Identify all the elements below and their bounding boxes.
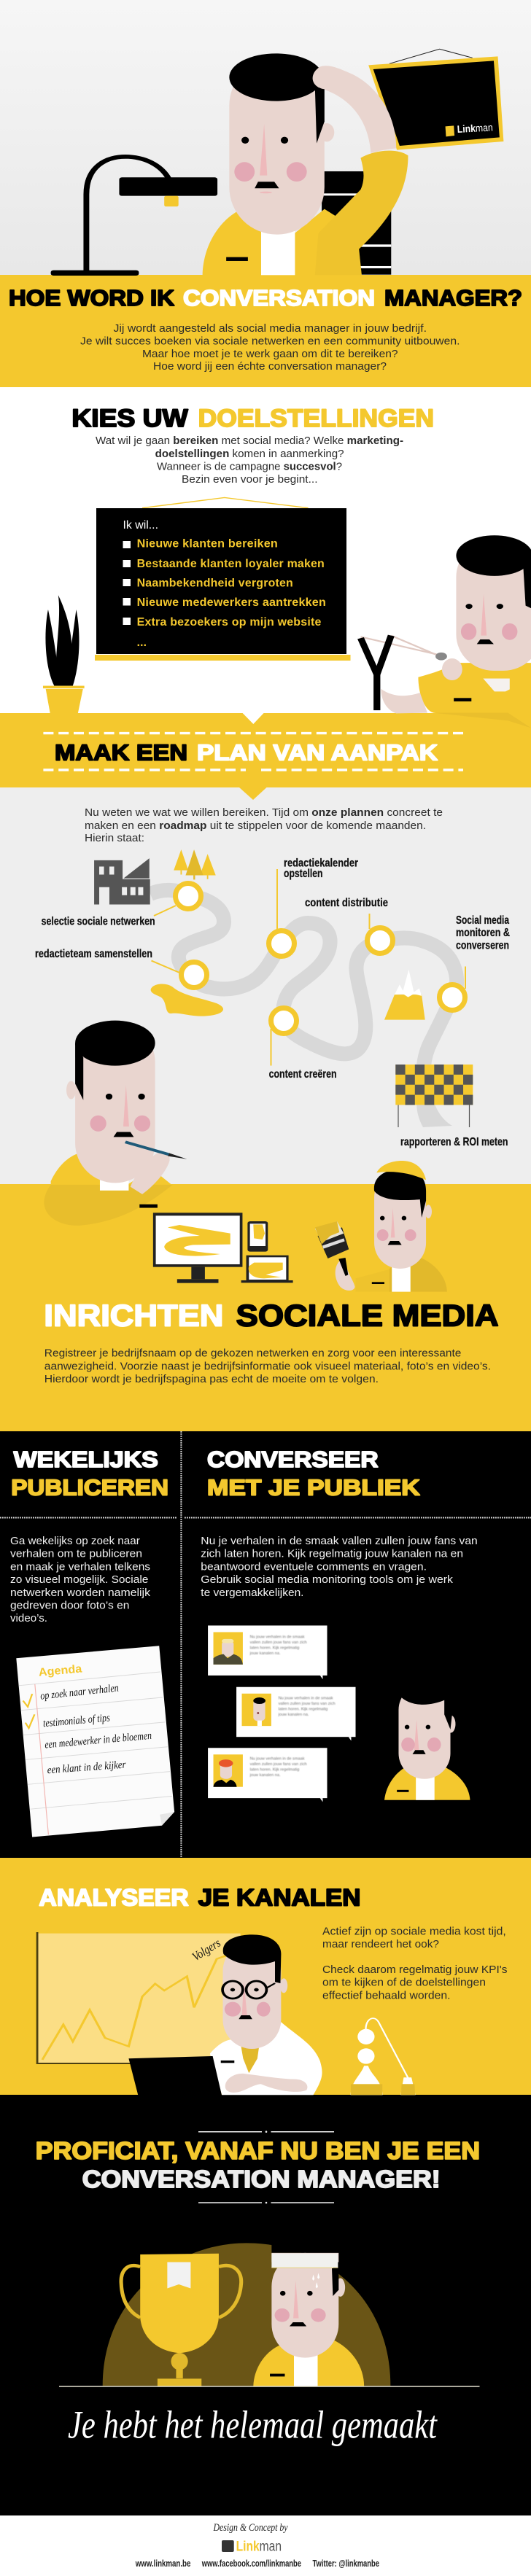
text: converseer: [201, 1535, 478, 1599]
heading: maak een plan van aanpak: PLAN VAN AANPAK: [197, 739, 438, 766]
chat bubble 2: vallen zullen jouw fans van zich: [279, 1702, 336, 1706]
dotted dividers: [0, 1431, 531, 1858]
roadmap labels: selectie sociale netwerken: [42, 916, 155, 928]
roadmap icon: trees: [174, 849, 216, 879]
heading: converseer met je publiek: CONVERSEER: [207, 1447, 379, 1472]
text: plan intro: Hierin staat:: [85, 832, 144, 844]
heading: proficiat: PROFICIAT, VANAF NU BEN JE EEN: [36, 2137, 480, 2164]
text: wekelijks publiceren: [10, 1535, 151, 1624]
roadmap labels: converseren: [456, 939, 509, 952]
character: manager with slingshot: [360, 535, 531, 728]
footer credits: www.linkman.be: [135, 2559, 190, 2569]
text: wekelijks publiceren: verhalen om te publiceren: [10, 1548, 142, 1560]
text: inrichten: [44, 1347, 491, 1385]
chat bubble 2: laten horen. Kijk regelmatig: [279, 1708, 327, 1712]
roadmap labels: Social media: [456, 914, 509, 927]
heading: analyseer je kanalen: ANALYSEER: [39, 1884, 189, 1910]
chat bubble 3: vallen zullen jouw fans van zich: [250, 1762, 307, 1767]
heading: inrichten sociale media: SOCIALE MEDIA: [236, 1298, 499, 1332]
roadmap labels: opstellen: [284, 868, 322, 880]
intro text: Je wilt succes boeken via sociale netwerken en een community uitbouwen.: [80, 335, 460, 348]
roadmap icon: pond: [151, 984, 223, 1016]
icon: desk lamp: [51, 157, 217, 276]
panel: goals blackboard: Extra bezoekers op mijn website: [137, 616, 322, 629]
icon: devices with paint swoosh: [153, 1213, 293, 1283]
title: HOE WORD IK: [9, 285, 175, 311]
icon: hanging sign with logo: [368, 49, 503, 150]
heading: wekelijks publiceren: PUBLICEREN: [11, 1474, 168, 1500]
heading: proficiat: CONVERSATION MANAGER!: [82, 2166, 441, 2192]
title: [9, 285, 522, 311]
arrow pointer into roadmap: [239, 787, 267, 800]
heading: kies uw doelstellingen: [71, 405, 434, 432]
agenda paper note: Agenda: [38, 1663, 82, 1679]
character: manager scratching head: [203, 53, 408, 275]
title: CONVERSATION: [183, 285, 375, 311]
text: inrichten: Hierdoor wordt je bedrijfspagina pas echt de moeite om te volgen.: [44, 1373, 379, 1385]
footer credits: www.facebook.com/linkmanbe: [201, 2559, 301, 2569]
panel: goals blackboard: Nieuwe klanten bereiken: [137, 538, 278, 550]
intro text: Jij wordt aangesteld als social media manager in jouw bedrijf.: [114, 322, 427, 335]
panel: goals blackboard: Nieuwe medewerkers aantrekken: [137, 596, 326, 609]
panel: goals blackboard: ...: [137, 637, 147, 649]
roadmap nodes and leader lines: [152, 869, 465, 1066]
text: converseer: zich laten horen. Kijk regelmatig jouw kanalen na en: [201, 1548, 463, 1560]
intro text: Hoe word jij een échte conversation manager?: [153, 360, 387, 373]
character: manager with paintbrush: [315, 1161, 447, 1292]
roadmap icon: mountain: [384, 970, 425, 1020]
agenda paper note: testimonials of tips: [42, 1712, 111, 1729]
text: inrichten: Registreer je bedrijfsnaam op de gekozen netwerken en zorg voor een interessante: [44, 1347, 461, 1360]
heading: inrichten sociale media: [44, 1298, 499, 1332]
text: inrichten: aanwezigheid. Voorzie naast je bedrijfsinformatie ook visueel materiaal, foto’s en video’s.: [44, 1360, 491, 1372]
closing script line: Je hebt het helemaal gemaakt: [68, 2403, 438, 2447]
character: manager listening: [384, 1676, 470, 1800]
icon: laboratory flasks: [351, 2018, 416, 2095]
chat bubble 2: Nu jouw verhalen in de smaak: [279, 1697, 333, 1701]
chat bubble 3: [208, 1748, 327, 1802]
ground line: [59, 2386, 480, 2387]
heading: maak een plan van aanpak: [43, 734, 463, 770]
text: analyseer: Actief zijn op sociale media kost tijd,: [322, 1925, 506, 1937]
roadmap labels: redactiekalender: [284, 857, 358, 869]
roadmap icon: building: [94, 858, 150, 905]
chat bubble 1: [208, 1625, 327, 1679]
chat bubble 1: vallen zullen jouw fans van zich: [250, 1641, 307, 1645]
text: plan intro: Nu weten we wat we willen bereiken. Tijd om onze plannen concreet te: [85, 806, 443, 819]
text: goals intro: Wat wil je gaan bereiken met social media? Welke marketing-: [96, 435, 403, 447]
roadmap road: [150, 890, 457, 1127]
footer credits: Design & Concept by: [213, 2522, 288, 2534]
intro text: [80, 322, 460, 373]
olive half circle backdrop: [103, 2243, 390, 2386]
chat bubble 3: Nu jouw verhalen in de smaak: [250, 1757, 305, 1762]
text: plan intro: maken en een roadmap uit te stippelen voor de komende maanden.: [85, 820, 426, 832]
text: goals intro: doelstellingen komen in aanmerking?: [155, 448, 344, 460]
heading: kies uw doelstellingen: KIES UW: [71, 405, 189, 432]
text: converseer: beantwoord eventuele comments en vragen.: [201, 1560, 427, 1573]
icon: hanging sign with logo: Linkman: [457, 121, 493, 135]
title: MANAGER?: [384, 285, 522, 311]
footer credits: Linkman: [236, 2540, 282, 2555]
roadmap labels: [35, 857, 510, 1148]
roadmap labels: content distributie: [305, 897, 388, 909]
heading: kies uw doelstellingen: DOELSTELLINGEN: [198, 405, 434, 432]
chat bubble 2: [236, 1687, 356, 1740]
text: wekelijks publiceren: netwerken worden namelijk: [10, 1587, 151, 1599]
line chart: volgers: Volgers: [190, 1936, 223, 1964]
chat bubble 3: laten horen. Kijk regelmatig: [250, 1768, 299, 1773]
icon: chair behind the manager: [322, 171, 391, 275]
chat bubble 1: Nu jouw verhalen in de smaak: [250, 1635, 305, 1639]
heading: proficiat: [36, 2131, 480, 2203]
icon: trophy: [121, 2254, 241, 2386]
text: converseer: Gebruik social media monitoring tools om je werk: [201, 1573, 454, 1586]
icon: plant: [43, 595, 85, 713]
heading: converseer met je publiek: MET JE PUBLIEK: [207, 1474, 420, 1500]
text: plan intro: [85, 806, 443, 844]
agenda paper note: [16, 1646, 174, 1837]
character: winner with headband: [253, 2244, 364, 2386]
chat bubble 1: jouw kanalen na.: [249, 1651, 281, 1656]
character: manager with pen: [44, 1021, 187, 1226]
text: goals intro: Wanneer is de campagne succesvol?: [157, 461, 342, 473]
heading: maak een plan van aanpak: MAAK EEN: [55, 739, 187, 766]
text: analyseer: maar rendeert het ook?: [322, 1938, 439, 1950]
roadmap labels: redactieteam samenstellen: [35, 948, 152, 960]
footer credits: Twitter: @linkmanbe: [312, 2559, 379, 2569]
heading: analyseer je kanalen: [39, 1884, 361, 1910]
text: goals intro: [96, 435, 403, 486]
footer credits: [135, 2522, 379, 2569]
arrow notch into plan band: [242, 712, 264, 724]
text: wekelijks publiceren: zo visueel mogelijk. Sociale: [10, 1573, 148, 1586]
line chart: volgers: [37, 1932, 241, 2063]
text: analyseer: [322, 1925, 508, 2001]
heading: wekelijks publiceren: [11, 1447, 168, 1500]
character: analyst with glasses and laptop: [128, 1934, 322, 2096]
roadmap labels: content creëren: [269, 1068, 337, 1081]
panel: goals blackboard: [95, 497, 350, 661]
panel: goals blackboard: Naambekendheid vergroten: [137, 577, 293, 589]
heading: wekelijks publiceren: WEKELIJKS: [14, 1447, 158, 1472]
text: converseer: te vergemakkelijken.: [201, 1587, 303, 1599]
text: analyseer: om te kijken of de doelstellingen: [322, 1977, 486, 1989]
heading: analyseer je kanalen: JE KANALEN: [198, 1884, 360, 1910]
agenda paper note: op zoek naar verhalen: [39, 1682, 120, 1703]
text: wekelijks publiceren: en maak je verhalen telkens: [10, 1560, 150, 1573]
text: wekelijks publiceren: Ga wekelijks op zoek naar: [10, 1535, 140, 1547]
text: analyseer: Check daarom regelmatig jouw KPI's: [322, 1964, 508, 1976]
text: converseer: Nu je verhalen in de smaak vallen zullen jouw fans van: [201, 1535, 478, 1547]
intro text: Maar hoe moet je te werk gaan om dit te bereiken?: [142, 348, 398, 360]
text: goals intro: Bezin even voor je begint...: [182, 473, 318, 486]
panel: goals blackboard: Bestaande klanten loyaler maken: [137, 558, 325, 570]
text: wekelijks publiceren: gedreven door foto’s en: [10, 1600, 129, 1611]
heading: converseer met je publiek: [207, 1447, 420, 1500]
chat bubble 2: jouw kanalen na.: [278, 1713, 309, 1717]
chat bubble 3: jouw kanalen na.: [249, 1773, 281, 1778]
heading: inrichten sociale media: INRICHTEN: [44, 1298, 223, 1332]
text: analyseer: effectief behaald worden.: [322, 1989, 451, 2001]
roadmap labels: monitoren &: [456, 927, 510, 939]
panel: goals blackboard: Ik wil...: [123, 519, 158, 532]
chat bubble 1: laten horen. Kijk regelmatig: [250, 1646, 299, 1651]
agenda paper note: een klant in de kijker: [47, 1759, 126, 1776]
agenda paper note: een medewerker in de bloemen: [44, 1730, 152, 1751]
roadmap icon: checkered finish flag: [395, 1065, 473, 1127]
text: wekelijks publiceren: video’s.: [10, 1612, 47, 1624]
